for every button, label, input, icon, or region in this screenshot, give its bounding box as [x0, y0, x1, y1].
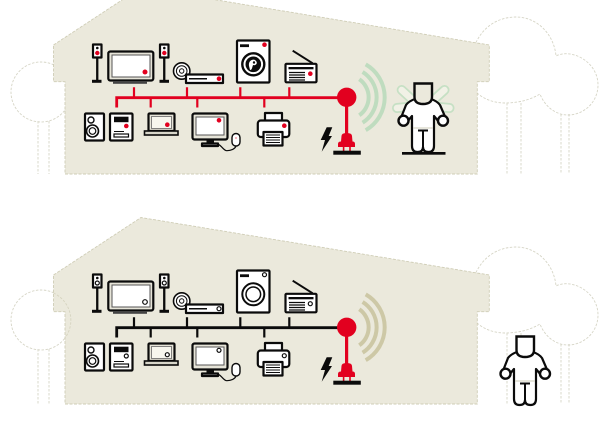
- radio: [286, 281, 316, 312]
- background trees, top: [11, 17, 598, 174]
- house silhouette, top: [54, 0, 489, 174]
- radio: [286, 51, 316, 82]
- speaker: [85, 114, 104, 140]
- person outside the house: [500, 336, 550, 405]
- icon: electricity bolt: [321, 357, 332, 382]
- home cinema: speakers and TV: [92, 274, 169, 314]
- printer: [258, 343, 289, 376]
- person affected by radiation: [397, 84, 450, 155]
- computer monitor with mouse: [192, 114, 240, 151]
- network bus: black: [117, 317, 346, 338]
- router node: [337, 318, 356, 337]
- router node: [337, 88, 356, 107]
- background trees, bottom: [11, 247, 598, 404]
- washing machine: [237, 270, 270, 312]
- laptop: [144, 114, 178, 135]
- home cinema: speakers and TV: [92, 44, 169, 84]
- printer: [258, 113, 289, 146]
- laptop: [144, 344, 178, 365]
- speaker: [85, 344, 104, 370]
- computer monitor with mouse: [192, 344, 240, 381]
- tree outline seen through the house: [54, 293, 71, 338]
- wireless signal waves: green: [359, 64, 385, 130]
- house silhouette, bottom: [54, 218, 489, 404]
- power line and plug: [333, 100, 361, 155]
- wireless signal waves: beige: [359, 294, 385, 360]
- washing machine: [237, 40, 270, 82]
- disc player: [174, 63, 223, 83]
- desktop tower: [110, 344, 132, 370]
- icon: electricity bolt: [321, 127, 332, 152]
- power line and plug: [333, 330, 361, 385]
- network bus: red: [117, 87, 346, 108]
- panel: home where devices are disconnected: [11, 218, 598, 405]
- disc player: [174, 293, 223, 313]
- radiation aura: [397, 90, 450, 108]
- desktop tower: [110, 114, 132, 140]
- panel: home where devices are connected: [11, 0, 598, 174]
